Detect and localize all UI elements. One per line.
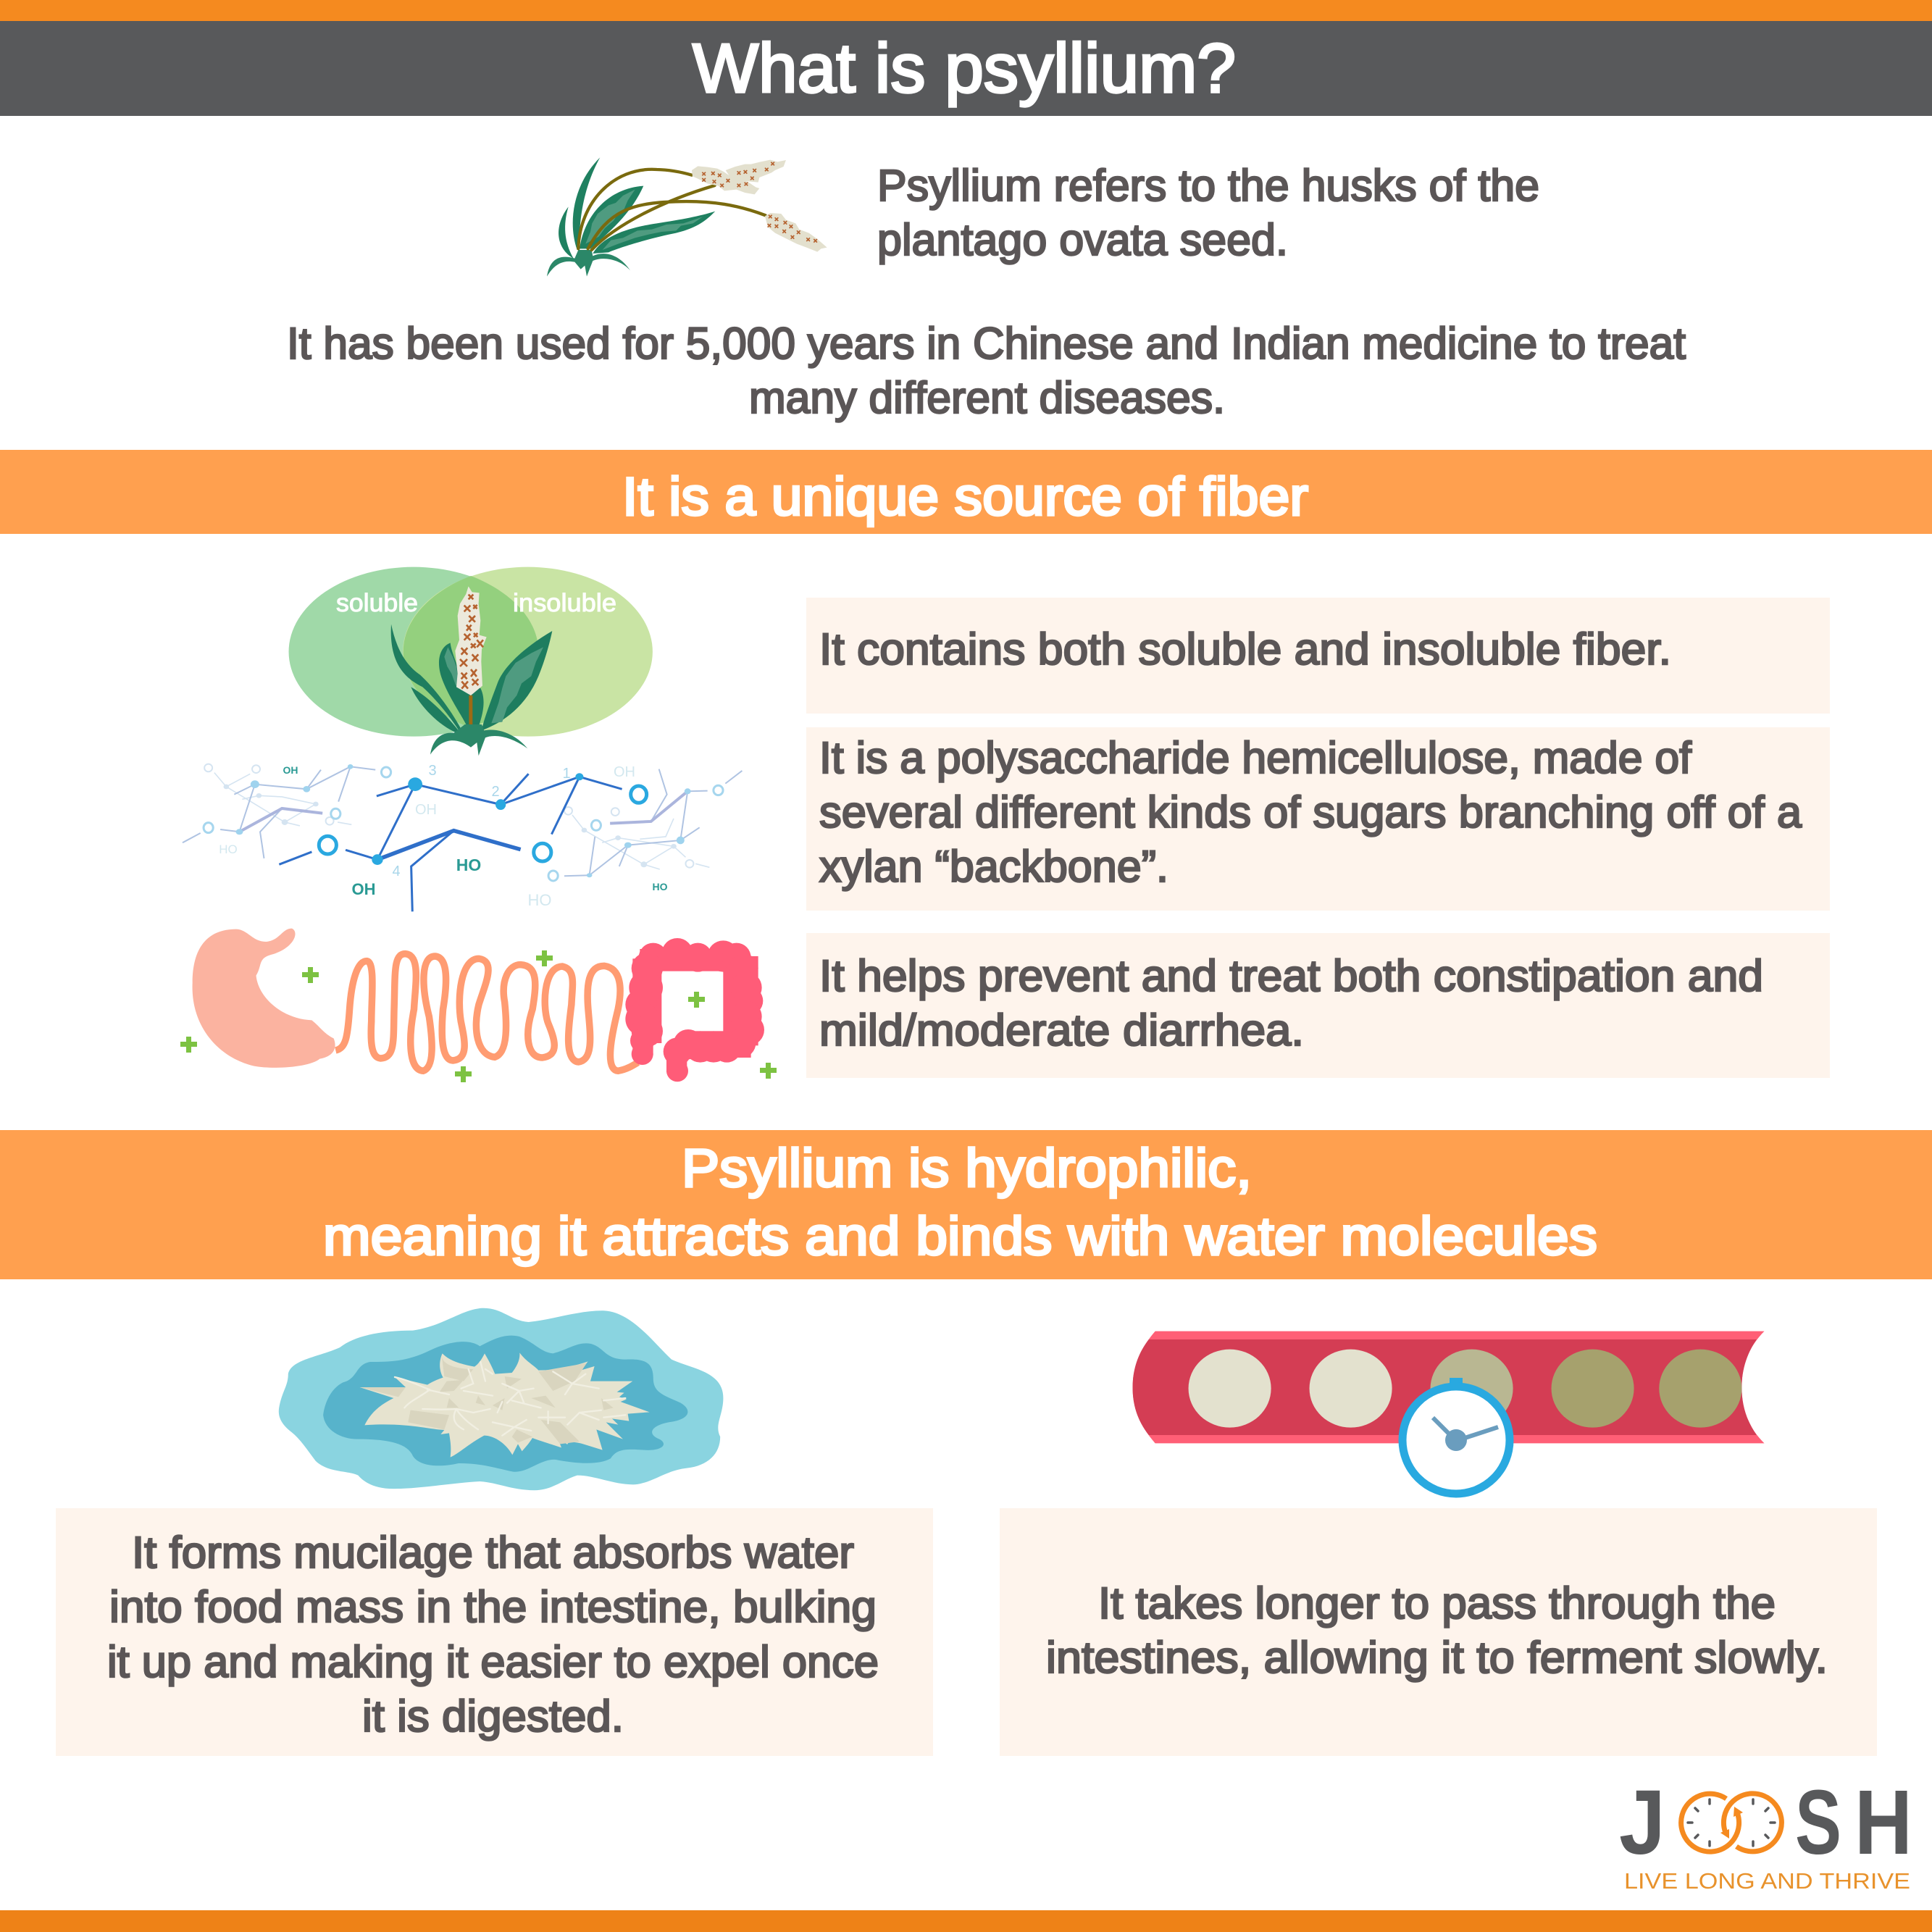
text: history of use: It has been used for 5,000 years in Chinese and Indian medicine to treat <box>287 319 1686 368</box>
section heading: hydrophilic <box>0 1130 1932 1279</box>
title banner <box>0 21 1932 116</box>
text: definition of psyllium: plantago ovata seed. <box>877 215 1288 264</box>
stopwatch icon <box>1402 1378 1510 1494</box>
text: definition of psyllium <box>877 161 1539 264</box>
panel: slow fermentation explanation: It takes longer to pass through the <box>1098 1578 1776 1628</box>
bottom orange band <box>0 1910 1932 1932</box>
section heading: hydrophilic: Psyllium is hydrophilic, <box>682 1138 1252 1198</box>
logo: JOOSH <box>1619 1771 1912 1894</box>
logo: JOOSH: S <box>1795 1771 1841 1873</box>
chemical structure of hemicellulose: HO <box>652 881 668 892</box>
chemical structure of hemicellulose: HO <box>456 856 481 874</box>
chemical structure of hemicellulose <box>183 763 742 911</box>
chemical structure of hemicellulose: 4 <box>392 863 401 879</box>
panel: contains both fibers: It contains both soluble and insoluble fiber. <box>819 624 1671 674</box>
panel: mucilage explanation: it up and making it easier to expel once <box>107 1637 879 1686</box>
chemical structure of hemicellulose: OH <box>614 764 635 780</box>
panel: slow fermentation explanation <box>1000 1508 1877 1756</box>
text: history of use: many different diseases. <box>749 373 1225 422</box>
panel: contains both fibers <box>806 598 1830 714</box>
stomach <box>193 929 335 1068</box>
digestive system illustration <box>180 929 777 1082</box>
psyllium husk pile <box>360 1352 650 1458</box>
panel: mucilage explanation: into food mass in the intestine, bulking <box>109 1582 877 1631</box>
section heading: unique source of fiber <box>0 450 1932 534</box>
logo: JOOSH: J <box>1619 1771 1665 1873</box>
panel: constipation and diarrhea: It helps prevent and treat both constipation and <box>819 951 1763 1000</box>
section heading: unique source of fiber: It is a unique source of fiber <box>622 467 1308 527</box>
large intestine <box>625 938 764 1082</box>
illustration: transit through intestine with stopwatch <box>1133 1331 1765 1494</box>
panel: polysaccharide hemicellulose <box>806 727 1830 911</box>
text: definition of psyllium: Psyllium refers to the husks of the <box>877 161 1539 210</box>
panel: mucilage explanation: it is digested. <box>362 1691 624 1741</box>
panel: constipation and diarrhea <box>806 933 1830 1078</box>
illustration: mucilage puddle <box>279 1308 723 1490</box>
chemical structure of hemicellulose: HO <box>527 891 552 909</box>
panel: polysaccharide hemicellulose: It is a polysaccharide hemicellulose, made of <box>819 733 1692 782</box>
text: history of use <box>287 319 1686 422</box>
chemical structure of hemicellulose: HO <box>219 842 238 856</box>
chemical structure of hemicellulose: 1 <box>562 766 571 782</box>
section heading: hydrophilic: meaning it attracts and binds with water molecules <box>323 1206 1597 1266</box>
chemical structure of hemicellulose: OH <box>352 880 375 898</box>
chemical structure of hemicellulose: OH <box>283 764 298 776</box>
venn diagram: soluble and insoluble fiber with plant: soluble <box>336 589 418 617</box>
panel: mucilage explanation <box>56 1508 933 1756</box>
small intestine <box>335 954 638 1071</box>
logo: JOOSH: LIVE LONG AND THRIVE <box>1624 1868 1910 1894</box>
panel: polysaccharide hemicellulose: several different kinds of sugars branching off of a <box>819 787 1802 837</box>
panel: constipation and diarrhea: mild/moderate diarrhea. <box>819 1005 1304 1055</box>
chemical structure of hemicellulose: 2 <box>491 784 500 800</box>
venn diagram: soluble and insoluble fiber with plant <box>289 567 653 756</box>
chemical structure of hemicellulose: 3 <box>428 763 437 779</box>
green plus signs <box>180 950 777 1082</box>
panel: slow fermentation explanation: intestines, allowing it to ferment slowly. <box>1046 1633 1828 1682</box>
panel: polysaccharide hemicellulose: xylan “backbone”. <box>819 842 1168 891</box>
panel: mucilage explanation: It forms mucilage that absorbs water <box>132 1528 854 1577</box>
logo: JOOSH: H <box>1854 1771 1912 1873</box>
title banner: What is psyllium? <box>693 30 1236 107</box>
icon: psyllium plant with seed spikes <box>547 157 827 277</box>
top orange band <box>0 0 1932 21</box>
venn diagram: soluble and insoluble fiber with plant: insoluble <box>513 589 616 617</box>
chemical structure of hemicellulose: OH <box>415 802 437 818</box>
